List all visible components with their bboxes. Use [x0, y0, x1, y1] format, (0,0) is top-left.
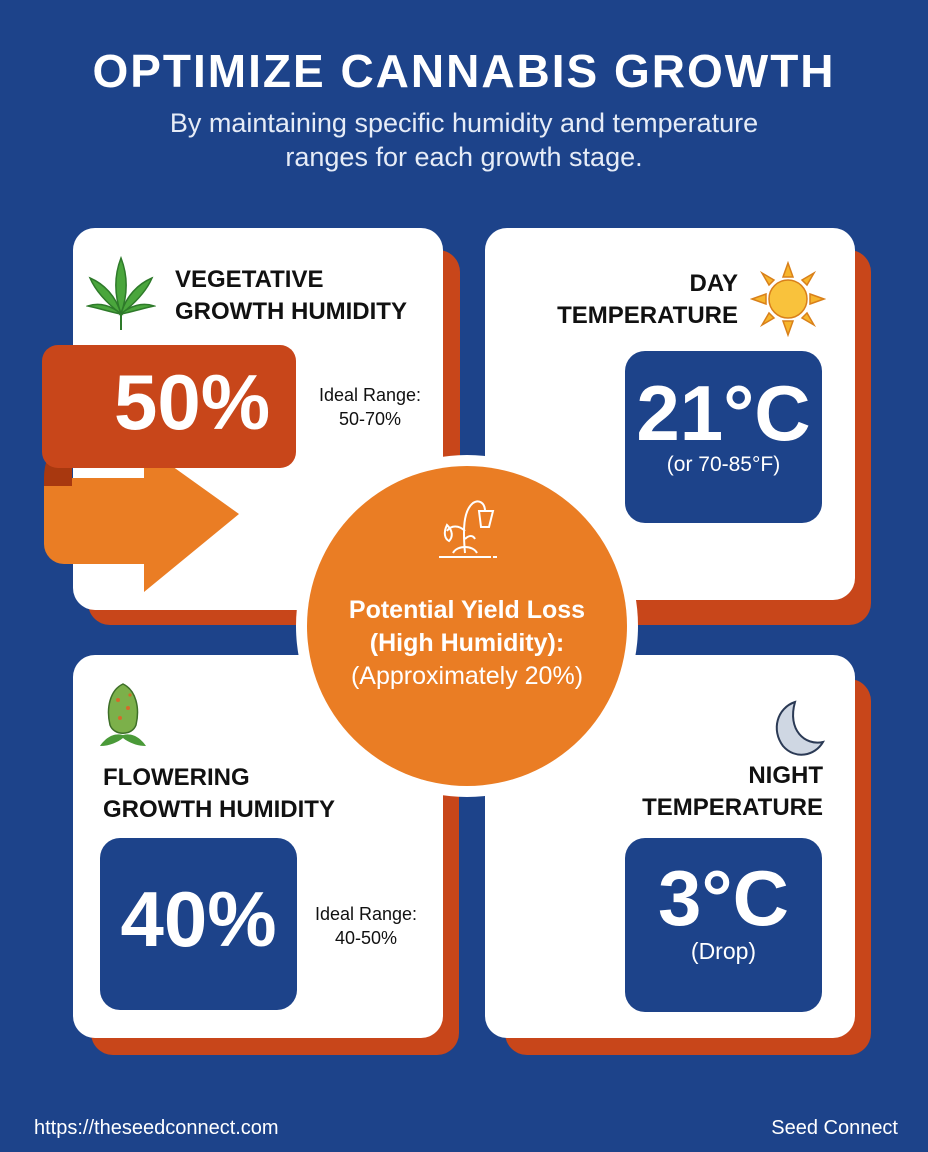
callout text: (Approximately 20%)	[351, 662, 583, 690]
panel: vegetative humidity	[42, 228, 460, 625]
panel: night temperature	[485, 655, 871, 1055]
value box 21°C: (or 70-85°F)	[667, 453, 780, 476]
icon: cannabis leaf	[86, 256, 156, 330]
value box 3°C: 3°C	[658, 854, 789, 942]
subtitle	[170, 108, 758, 172]
heading: FLOWERING	[103, 764, 250, 791]
value box 21°C	[625, 351, 822, 523]
arrow ribbon	[44, 462, 239, 592]
subtitle: ranges for each growth stage.	[285, 142, 643, 172]
ideal range	[319, 385, 421, 429]
callout text: Potential Yield Loss	[349, 596, 585, 624]
panel: flowering humidity	[73, 655, 459, 1055]
value box 40%: 40%	[120, 875, 277, 963]
value box 21°C: 21°C	[636, 369, 811, 457]
footer url: https://theseedconnect.com	[34, 1117, 279, 1139]
icon: wilting plant	[439, 500, 497, 558]
ideal range: 40-50%	[335, 928, 397, 948]
ideal range: Ideal Range:	[319, 385, 421, 405]
value box 50%	[42, 345, 296, 468]
heading: GROWTH HUMIDITY	[103, 796, 335, 823]
heading: TEMPERATURE	[557, 302, 738, 329]
heading: VEGETATIVE	[175, 266, 323, 293]
panel: day temperature	[485, 228, 871, 625]
callout text	[349, 596, 585, 690]
heading: DAY	[690, 270, 738, 297]
value box 50%: 50%	[114, 358, 270, 446]
ideal range: Ideal Range:	[315, 904, 417, 924]
icon: bud	[100, 683, 146, 746]
heading: NIGHT	[748, 762, 823, 789]
heading: GROWTH HUMIDITY	[175, 298, 407, 325]
heading	[557, 270, 738, 329]
heading	[103, 764, 335, 823]
value box 3°C: (Drop)	[691, 938, 756, 964]
heading	[642, 762, 823, 821]
heading: TEMPERATURE	[642, 794, 823, 821]
ideal range: 50-70%	[339, 409, 401, 429]
value box 40%	[100, 838, 297, 1010]
footer brand: Seed Connect	[771, 1117, 898, 1139]
ideal range	[315, 904, 417, 948]
callout text: (High Humidity):	[370, 629, 564, 657]
icon: moon	[776, 700, 825, 756]
subtitle: By maintaining specific humidity and temperature	[170, 108, 758, 138]
icon: sun	[750, 261, 826, 337]
title: OPTIMIZE CANNABIS GROWTH	[92, 45, 836, 97]
heading	[175, 266, 407, 325]
value box 3°C	[625, 838, 822, 1012]
callout: yield loss circle	[296, 455, 638, 797]
